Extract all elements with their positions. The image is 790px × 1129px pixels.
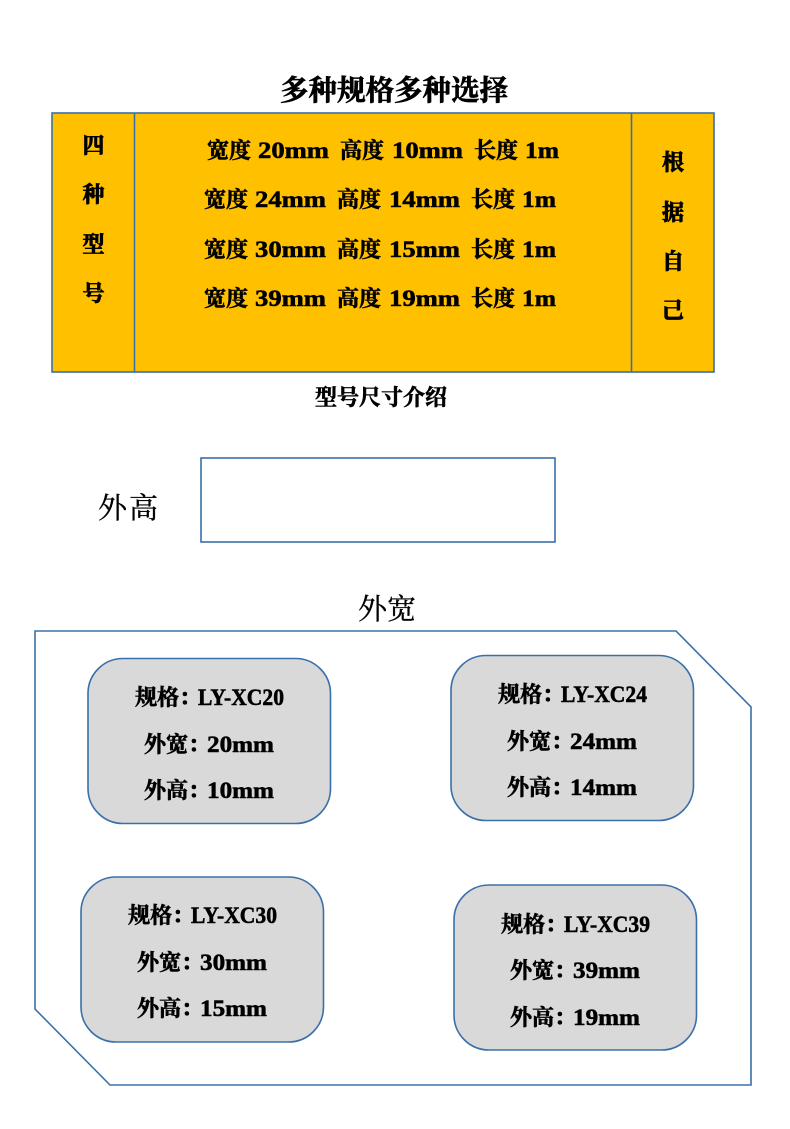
size rows: 39mm — [255, 286, 326, 312]
size rows: 高度 — [337, 286, 381, 311]
card: LY-XC20: 10mm — [207, 778, 274, 804]
card: LY-XC39: 外高： — [510, 1005, 576, 1030]
size rows: 高度 — [337, 187, 381, 212]
left column label: 号 — [82, 281, 105, 306]
card: LY-XC39: 39mm — [573, 958, 640, 984]
size rows: 15mm — [389, 237, 460, 263]
card: LY-XC24: 14mm — [570, 775, 637, 801]
card: LY-XC20: LY-XC20 — [198, 685, 284, 711]
card: LY-XC24: 外高： — [507, 775, 573, 800]
card: LY-XC30 — [81, 877, 324, 1042]
card: LY-XC39: LY-XC39 — [564, 912, 650, 938]
size rows: 长度 — [471, 237, 515, 262]
size rows: 14mm — [389, 187, 460, 213]
card: LY-XC24: 规格： — [498, 682, 564, 707]
left column label: 型 — [82, 232, 105, 257]
size rows: 24mm — [255, 187, 326, 213]
size rows: 长度 — [471, 187, 515, 212]
size rows: 1m — [522, 187, 556, 213]
size rows: 高度 — [337, 237, 381, 262]
card: LY-XC30: 规格： — [128, 903, 194, 928]
right column label: 自 — [662, 249, 684, 274]
size rows: 长度 — [474, 138, 518, 163]
card: LY-XC24 — [451, 656, 694, 820]
outer width label: 外宽 — [358, 587, 416, 628]
size rows: 高度 — [340, 138, 384, 163]
size rows: 宽度 — [204, 187, 248, 212]
card: LY-XC24: LY-XC24 — [561, 682, 647, 708]
caption: 型号尺寸介绍 — [315, 385, 447, 410]
card: LY-XC30: 15mm — [200, 996, 267, 1022]
outer height label: 外高 — [98, 486, 160, 527]
card: LY-XC39: 规格： — [501, 912, 567, 937]
right column label — [662, 150, 684, 323]
panel: model sizes table — [52, 113, 714, 372]
size rows — [204, 138, 559, 312]
card: LY-XC20: 20mm — [207, 732, 274, 758]
size rows: 宽度 — [207, 138, 251, 163]
card: LY-XC39: 外宽： — [510, 958, 576, 983]
size rows: 1m — [522, 286, 556, 312]
size rows: 19mm — [389, 286, 460, 312]
diagram: rectangle cross section — [201, 458, 555, 542]
card: LY-XC24: 24mm — [570, 729, 637, 755]
card: LY-XC30: 外宽： — [137, 950, 203, 975]
size rows: 20mm — [258, 138, 329, 164]
card: LY-XC20 — [88, 658, 330, 824]
left column label: 种 — [82, 182, 105, 207]
title: 多种规格多种选择 — [280, 74, 508, 107]
panel: specification cards — [35, 631, 751, 1085]
card: LY-XC20: 规格： — [135, 685, 201, 710]
size rows: 1m — [522, 237, 556, 263]
size rows: 宽度 — [204, 237, 248, 262]
size rows: 宽度 — [204, 286, 248, 311]
card: LY-XC20: 外宽： — [144, 732, 210, 757]
card: LY-XC39: 19mm — [573, 1005, 640, 1031]
card: LY-XC24: 外宽： — [507, 729, 573, 754]
size rows: 长度 — [471, 286, 515, 311]
card: LY-XC39 — [454, 885, 696, 1050]
right column label: 根 — [662, 150, 684, 175]
size rows: 30mm — [255, 237, 326, 263]
card: LY-XC30: 外高： — [137, 996, 203, 1021]
card: LY-XC30: LY-XC30 — [191, 903, 277, 929]
right column label: 据 — [662, 200, 684, 225]
card: LY-XC30: 30mm — [200, 950, 267, 976]
right column label: 己 — [662, 298, 684, 323]
card: LY-XC20: 外高： — [144, 778, 210, 803]
size rows: 1m — [525, 138, 559, 164]
size rows: 10mm — [392, 138, 463, 164]
left column label — [82, 133, 105, 306]
left column label: 四 — [82, 133, 105, 158]
